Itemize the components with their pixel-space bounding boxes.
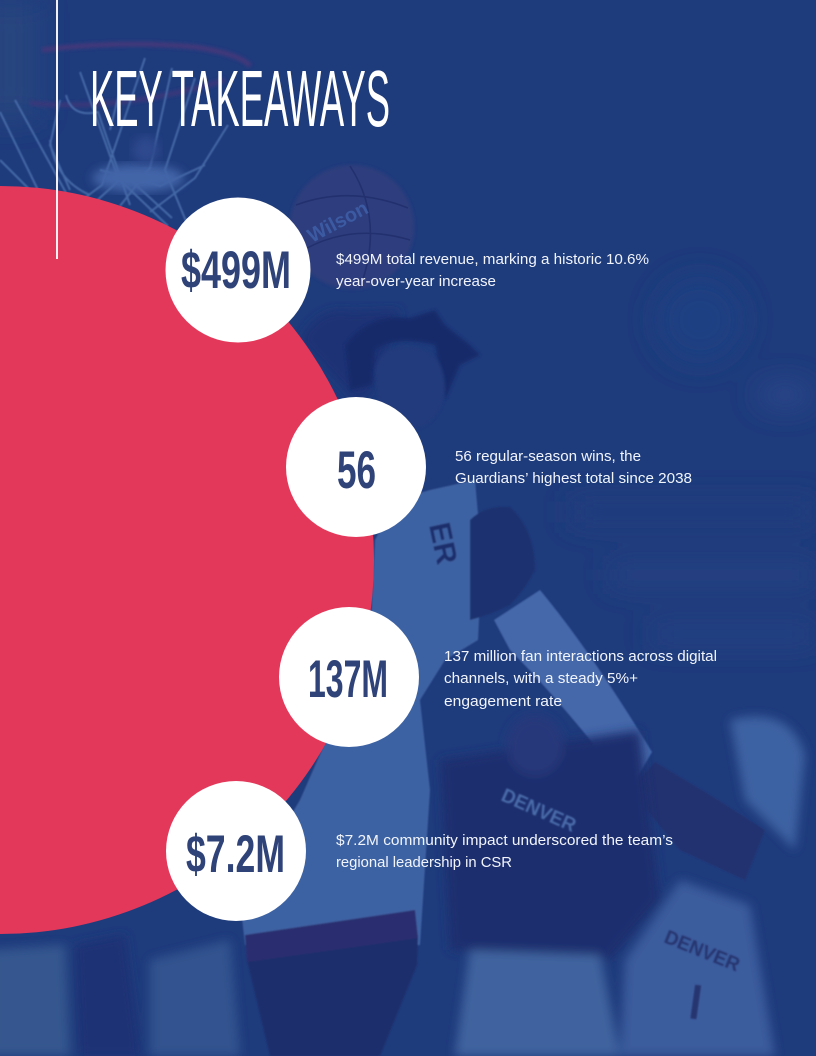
description: wins: Guardians’ highest total since 2038: [455, 471, 692, 487]
basketball: Wilson: [304, 197, 372, 247]
description: wins: 56 regular-season wins, the: [455, 449, 641, 465]
stat badge: $499M: [166, 198, 310, 342]
player arm and head: [300, 310, 480, 440]
crowd blur: [0, 0, 816, 643]
description: revenue: year-over-year increase: [336, 274, 496, 290]
stat badge: $499M: $499M: [181, 241, 291, 300]
description: revenue: $499M total revenue, marking a historic 10.6%: [336, 252, 649, 268]
background photo: basketball player dunking, blue duotone: DENVER: [661, 927, 743, 976]
description: fan interactions: engagement rate: [444, 694, 562, 710]
description: fan interactions: [444, 649, 717, 710]
rim: [30, 44, 250, 105]
description: community impact: [336, 833, 673, 871]
description: wins: [455, 449, 692, 487]
net: [0, 58, 228, 226]
basketball: [290, 165, 414, 289]
stat badge: $7.2M: $7.2M: [186, 825, 285, 884]
description: fan interactions: channels, with a steady 5%+: [444, 671, 638, 687]
jersey and body: ER: [422, 520, 463, 568]
background players: [0, 715, 805, 1056]
stat 3: fan interactions: [279, 607, 717, 747]
vertical accent line: [56, 0, 58, 259]
stat badge: 137M: [279, 607, 419, 747]
description: fan interactions: 137 million fan interactions across digital: [444, 649, 717, 665]
red semicircle panel: [0, 186, 374, 934]
stat badge: $7.2M: [166, 781, 306, 921]
stat 1: revenue: [166, 198, 649, 342]
background photo: basketball player dunking, blue duotone: DENVER: [498, 785, 579, 837]
text: KEY TAKEAWAYS: [90, 54, 390, 143]
jersey and body: [240, 480, 765, 1056]
description: community impact: regional leadership in CSR: [336, 855, 512, 871]
stat badge: 56: [286, 397, 426, 537]
stat 2: wins: [286, 397, 692, 537]
stat 4: community impact: [166, 781, 673, 921]
description: community impact: $7.2M community impact underscored the team’s: [336, 833, 673, 849]
description: revenue: [336, 252, 649, 290]
stat badge: 56: 56: [337, 441, 376, 500]
stat badge: 137M: 137M: [308, 650, 388, 709]
